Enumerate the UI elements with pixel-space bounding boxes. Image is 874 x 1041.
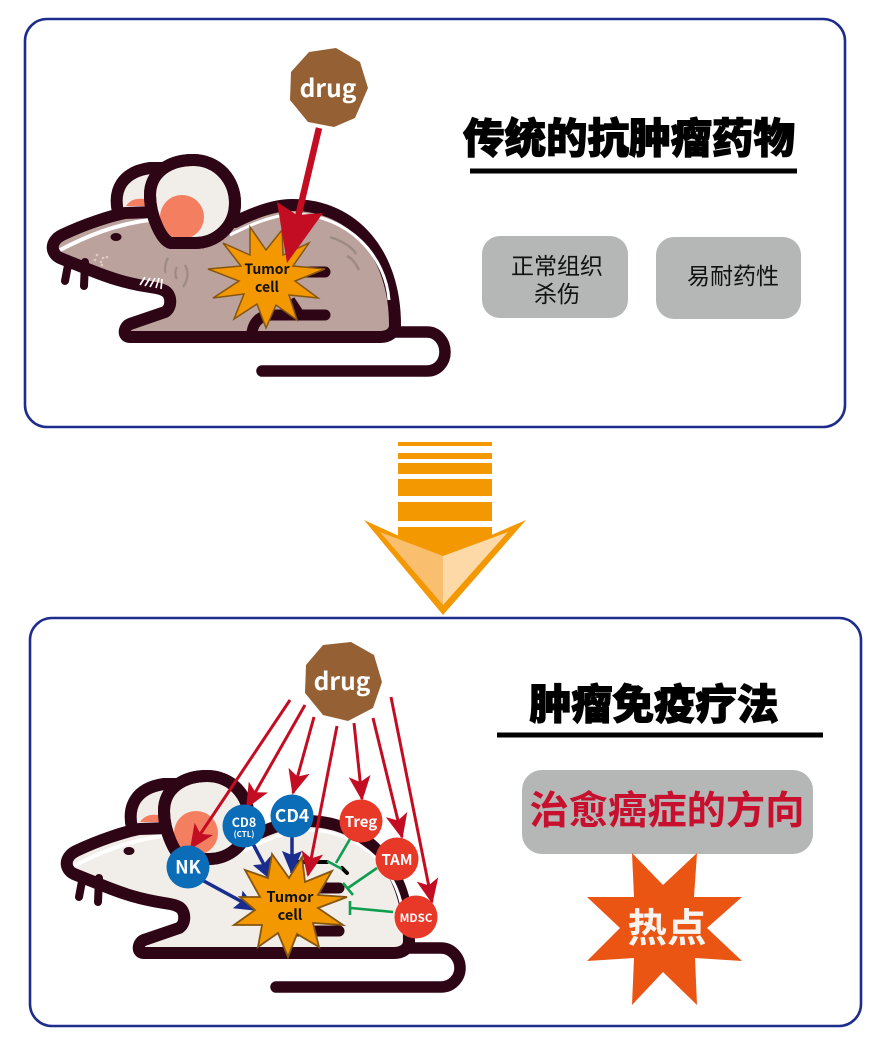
mouse: immunotherapy panel [67,776,460,987]
cell: CD4: CD4 [275,803,309,828]
icon: drug: drug [300,70,357,105]
arrows: immune cells to tumor [202,835,292,910]
icon: drug: drug [314,663,371,698]
cell: NK [166,846,210,888]
heading: traditional antitumor drugs: 传统的抗肿瘤药物 [463,105,795,165]
heading underline [470,168,797,174]
box: normal tissue damage: 杀伤 [534,275,580,309]
cell: CD8 CTL: (CTL) [234,829,254,840]
mouse: traditional panel [53,160,445,371]
cell: CD8 CTL: CD8 [232,812,256,831]
box: normal tissue damage: 正常组织 [511,247,603,281]
box: normal tissue damage [482,236,628,318]
cell: TAM: TAM [381,849,413,870]
box: drug resistance [656,237,801,319]
heading underline [497,732,823,738]
icon: drug [305,642,382,721]
inhibition lines [327,839,393,915]
tumor cell star: cell [278,904,303,925]
arrow: large transition arrow [364,442,526,615]
tumor cell star: Tumor [267,886,314,907]
box: direction for curing cancer [522,770,813,854]
heading: tumor immunotherapy: 肿瘤免疫疗法 [529,671,779,731]
tumor cell star [208,227,325,328]
cell: MDSC: MDSC [400,910,433,926]
arrow: drug to tumor [277,128,323,263]
tumor cell star [234,854,347,957]
cell: NK: NK [175,854,202,880]
cell: CD8 CTL [222,804,266,848]
cell: TAM [376,838,418,880]
arrows: drug to targets [191,697,432,902]
cell: Treg: Treg [345,811,377,832]
cell: Treg [340,800,382,842]
panel: traditional antitumor drugs [25,19,845,427]
box: drug resistance: 易耐药性 [687,257,779,291]
badge: hot topic [587,853,742,1005]
tumor cell star: Tumor [244,259,291,279]
cell: MDSC [394,896,438,938]
tumor cell star: cell [255,277,280,297]
box: direction for curing cancer: 治愈癌症的方向 [529,779,805,836]
panel: tumor immunotherapy [30,618,861,1026]
cell: CD4 [270,794,314,838]
icon: drug [290,48,368,127]
badge: hot topic: 热点 [628,897,706,954]
